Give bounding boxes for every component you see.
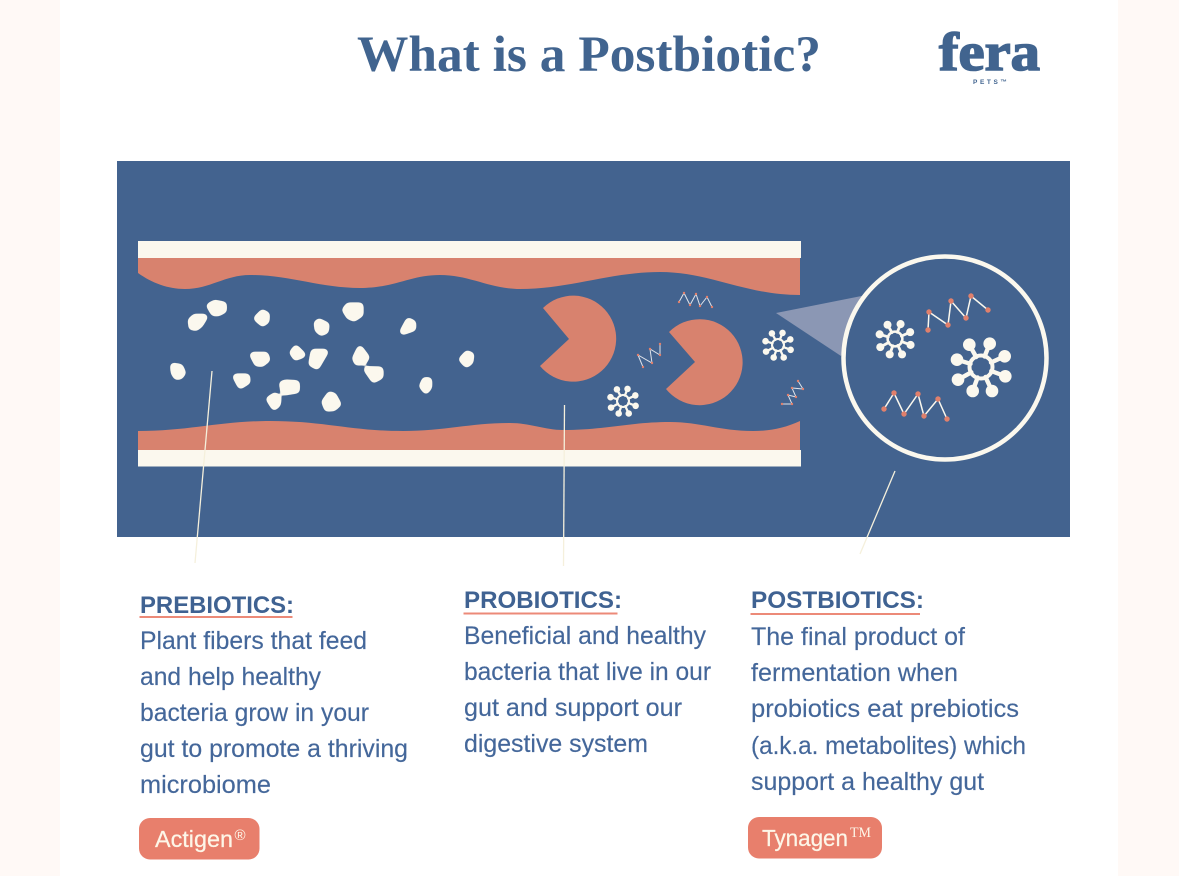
- gut lining: top salmon: [138, 258, 800, 295]
- description: gut to promote a thriving: [140, 735, 408, 763]
- magnified virus large: [951, 337, 1012, 397]
- magnifier circle: [844, 256, 1046, 460]
- heading underline: [464, 612, 618, 614]
- gut wall: top cream band: [138, 241, 801, 258]
- badge: Tynagen: TM: [850, 825, 871, 841]
- text block: prebiotics: [139, 592, 408, 860]
- magnifier beam: [776, 296, 864, 356]
- logo: fera pets: fera: [939, 22, 1040, 82]
- leader line: postbiotics: [860, 471, 895, 554]
- description: and help healthy: [140, 663, 321, 691]
- postbiotic viruses in gut: [607, 330, 794, 417]
- description: [140, 627, 408, 799]
- description: microbiome: [140, 771, 271, 799]
- description: probiotics eat prebiotics: [751, 695, 1019, 723]
- leader line: prebiotics: [195, 371, 212, 563]
- leader line: probiotics: [564, 405, 565, 566]
- heading underline: [140, 616, 292, 618]
- description: (a.k.a. metabolites) which: [751, 732, 1026, 760]
- prebiotic fiber particles: [174, 303, 471, 408]
- description: bacteria that live in our: [464, 658, 711, 686]
- description: Beneficial and healthy: [464, 622, 706, 650]
- description: bacteria grow in your: [140, 699, 369, 727]
- magnified metabolite bottom: [881, 390, 950, 422]
- gut lining: bottom salmon: [138, 421, 800, 450]
- magnified metabolite top: [925, 293, 991, 333]
- badge: Actigen: Actigen: [155, 826, 233, 852]
- heading: prebiotics: PREBIOTICS:: [140, 592, 294, 619]
- probiotic pacman 1: [540, 296, 616, 382]
- magnified virus small: [876, 320, 915, 358]
- title: What is a Postbiotic?: [357, 27, 821, 83]
- description: gut and support our: [464, 694, 682, 722]
- heading: postbiotics: POSTBIOTICS:: [751, 587, 924, 614]
- badge: Actigen: [139, 818, 260, 860]
- description: The final product of: [751, 623, 965, 651]
- description: [464, 622, 711, 758]
- description: Plant fibers that feed: [140, 627, 367, 655]
- gut wall: bottom cream band: [138, 450, 801, 466]
- description: [751, 623, 1026, 796]
- logo: fera pets: PETS™: [973, 79, 1007, 86]
- zigzag end dots: [637, 292, 804, 405]
- text block: probiotics: [464, 587, 711, 758]
- panel: gut illustration: [117, 161, 1070, 537]
- small metabolite zigzags: [638, 293, 803, 404]
- text block: postbiotics: [748, 587, 1026, 858]
- badge: Actigen: ®: [234, 827, 246, 844]
- heading: probiotics: PROBIOTICS:: [464, 587, 622, 614]
- badge: Tynagen: Tynagen: [762, 825, 848, 851]
- description: fermentation when: [751, 659, 958, 687]
- description: support a healthy gut: [751, 768, 984, 796]
- probiotic pacman 2: [666, 319, 743, 405]
- description: digestive system: [464, 730, 648, 758]
- heading underline: [750, 613, 920, 615]
- badge: Tynagen: [748, 817, 882, 858]
